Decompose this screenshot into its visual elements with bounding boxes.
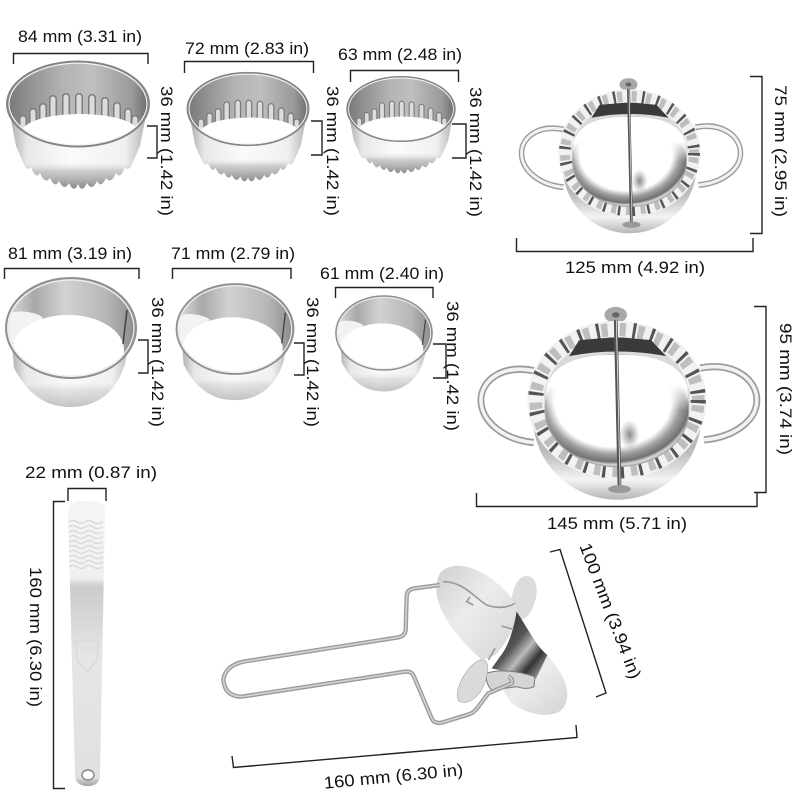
cutter: plain medium [176,284,294,400]
dimension: fluted medium: 36 mm (1.42 in) [323,86,342,216]
dimension: plain small [320,264,462,431]
dough press tool [223,566,567,723]
dimension: large mold: 145 mm (5.71 in) [547,514,687,533]
dimension: fluted large: 36 mm (1.42 in) [157,86,176,216]
dimension: large mold [476,306,795,533]
dimension: press tool [232,540,645,793]
dimension: plain large: 36 mm (1.42 in) [148,297,167,427]
dimension: press tool: 100 mm (3.94 in) [575,540,645,682]
dimension: press tool: 160 mm (6.30 in) [323,760,464,793]
cutter: plain large [6,278,136,407]
dimension: fluted large [14,27,176,216]
cutter: fluted large [7,62,149,189]
dimension: spatula: 22 mm (0.87 in) [25,463,157,482]
cutter: fluted medium [187,73,309,181]
dumpling mold: large [481,307,757,500]
dumpling mold: small [522,78,740,233]
dimension: plain medium: 71 mm (2.79 in) [171,244,295,263]
dimension: small mold [516,76,790,277]
cutter: fluted small [347,77,455,173]
dimension: fluted small: 63 mm (2.48 in) [338,45,462,64]
cutter: plain small [336,296,432,391]
dimension: plain small: 36 mm (1.42 in) [443,301,462,431]
dimension: spatula [25,463,157,788]
dimension: small mold: 125 mm (4.92 in) [565,258,705,277]
dimension: plain medium [171,244,322,427]
dimension: fluted medium: 72 mm (2.83 in) [185,39,309,58]
dimension: fluted large: 84 mm (3.31 in) [18,27,142,46]
dimension: fluted medium [184,39,342,216]
dimension: plain large [4,244,167,427]
dimension: plain medium: 36 mm (1.42 in) [303,297,322,427]
spatula [68,501,105,786]
dimension: fluted small [338,45,485,217]
dimension: fluted small: 36 mm (1.42 in) [466,87,485,217]
dimension: small mold: 75 mm (2.95 in) [771,85,790,217]
dimension: spatula: 160 mm (6.30 in) [26,567,45,707]
dimension: plain large: 81 mm (3.19 in) [8,244,132,263]
dimension: large mold: 95 mm (3.74 in) [776,323,795,455]
dimension: plain small: 61 mm (2.40 in) [320,264,444,283]
